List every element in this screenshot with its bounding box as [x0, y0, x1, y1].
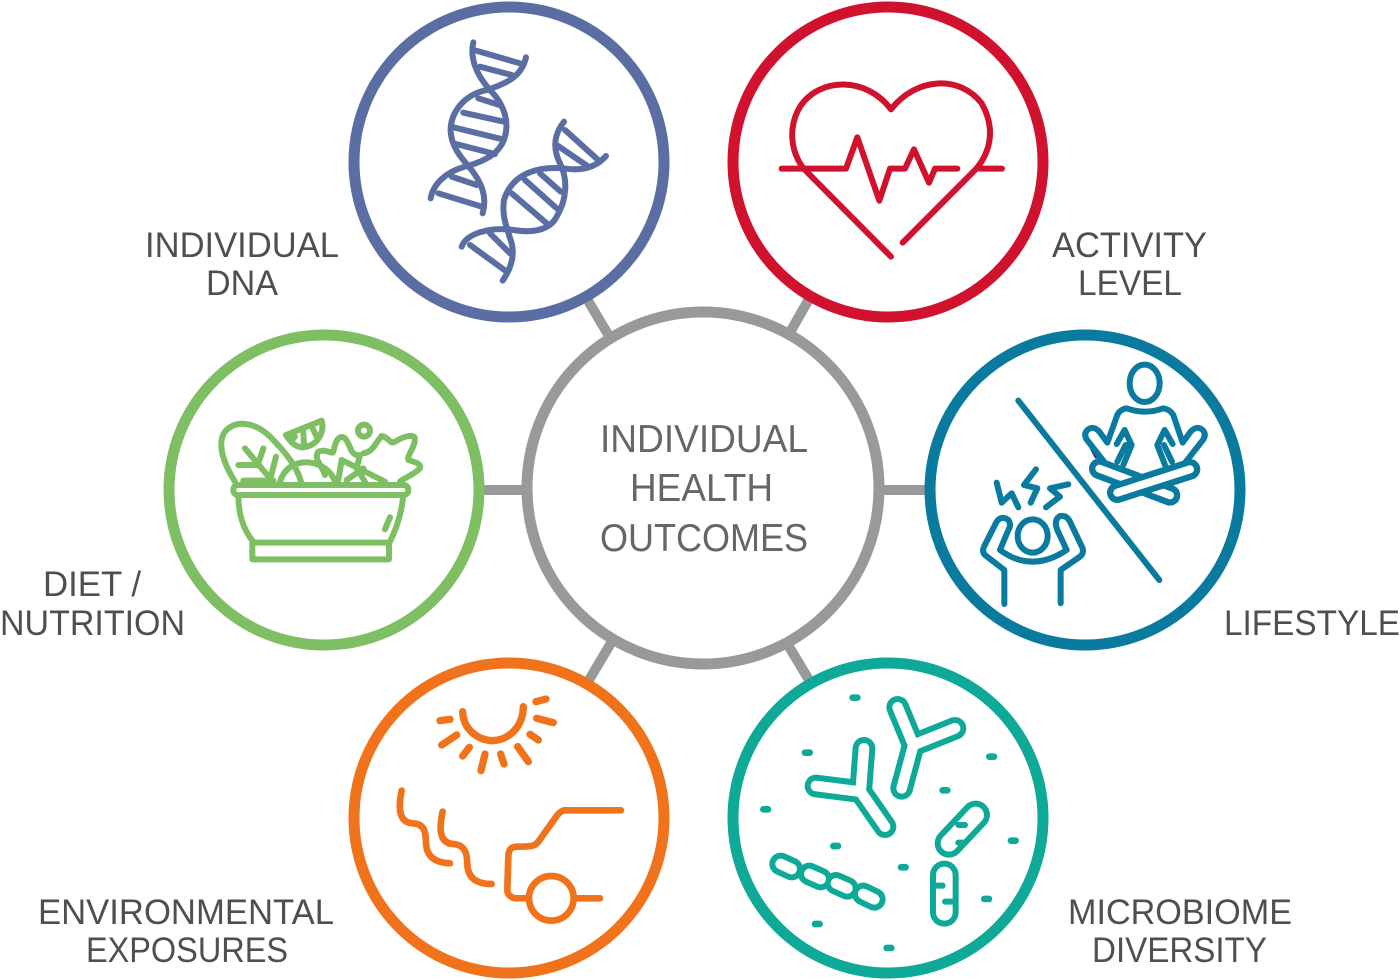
panel: diet and nutrition circle: [169, 335, 479, 645]
label: environmental exposures: [38, 892, 334, 970]
panel: individual DNA circle: [354, 7, 664, 317]
label: individual DNA: INDIVIDUAL: [145, 225, 339, 265]
icon: microbes: [763, 698, 1016, 948]
icon: salad bowl: [221, 421, 420, 559]
label: microbiome diversity: MICROBIOME: [1068, 892, 1292, 932]
central circle: individual health outcomes: INDIVIDUAL: [600, 418, 808, 461]
label: activity level: LEVEL: [1078, 263, 1182, 303]
label: environmental exposures: ENVIRONMENTAL: [38, 892, 334, 932]
label: diet and nutrition: [0, 564, 185, 643]
central circle: individual health outcomes: HEALTH: [630, 467, 773, 510]
label: activity level: [1052, 225, 1207, 303]
panel: lifestyle circle: [930, 335, 1240, 645]
panel: microbiome diversity circle: [733, 663, 1043, 973]
label: diet and nutrition: DIET /: [43, 564, 141, 604]
label: individual DNA: [145, 225, 339, 303]
central circle: individual health outcomes: OUTCOMES: [600, 517, 808, 560]
panel: environmental exposures circle: [354, 663, 664, 973]
icon: DNA double helices: [431, 42, 606, 281]
label: diet and nutrition: NUTRITION: [0, 603, 185, 643]
label: individual DNA: DNA: [206, 263, 278, 303]
connectors: [484, 299, 926, 680]
icon: stress versus meditation: [983, 365, 1205, 604]
label: microbiome diversity: DIVERSITY: [1092, 930, 1267, 970]
panel: activity level circle: [733, 7, 1043, 317]
central circle: individual health outcomes: [527, 312, 879, 664]
icon: sun, smoke and car: [400, 699, 621, 921]
label: activity level: ACTIVITY: [1052, 225, 1207, 265]
label: environmental exposures: EXPOSURES: [86, 930, 288, 970]
icon: heart with pulse: [782, 83, 1002, 257]
label: microbiome diversity: [1068, 892, 1292, 970]
